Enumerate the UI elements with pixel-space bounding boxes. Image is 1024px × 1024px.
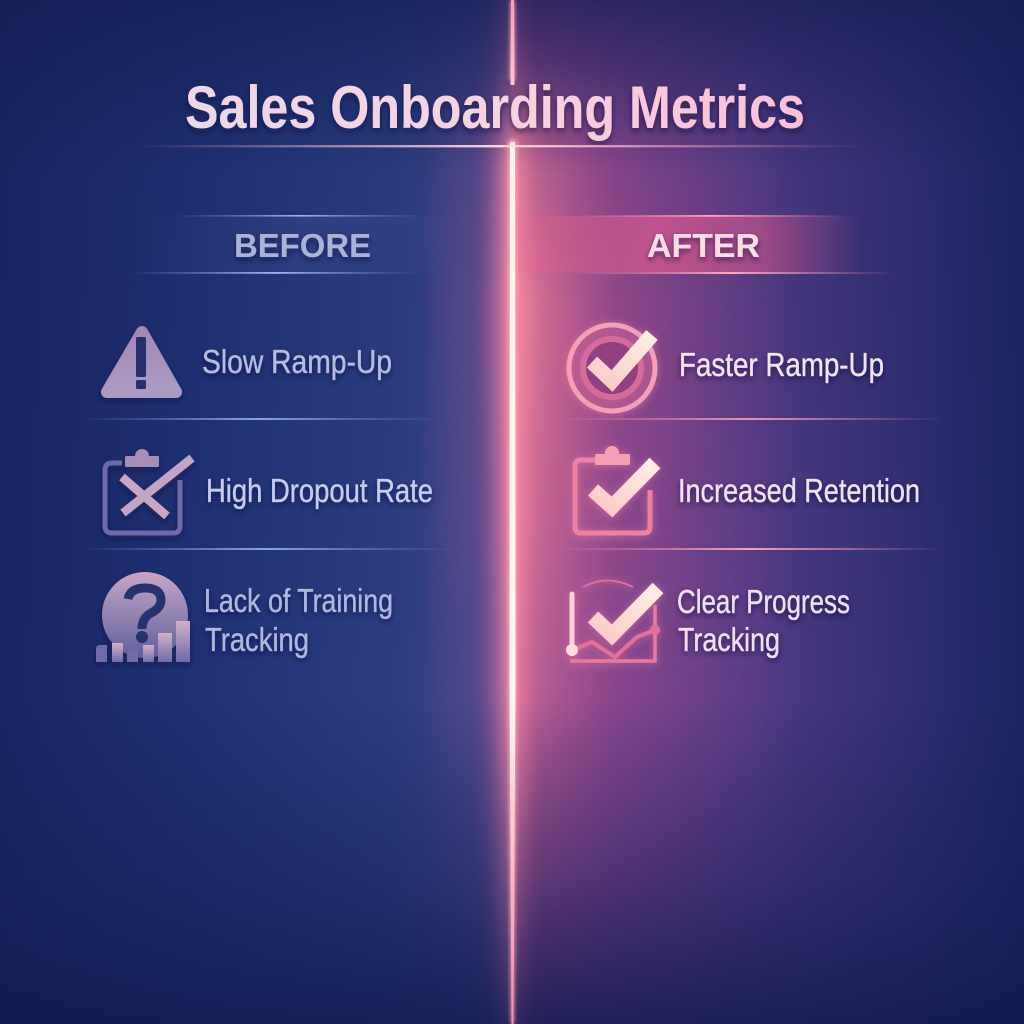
label: increased retention: Increased Retention [678,472,920,509]
label: lack of training tracking: Lack of Training [204,582,393,619]
row: faster ramp-up [569,325,884,411]
panel: after [518,215,945,661]
row: lack of training tracking [96,572,393,662]
row: high dropout rate [105,449,433,533]
label: clear progress tracking: Clear Progress [677,583,850,620]
label: faster ramp-up: Faster Ramp-Up [679,346,884,383]
label: slow ramp-up: Slow Ramp-Up [202,343,392,380]
icon: question with bars [96,572,190,662]
central glowing divider [500,0,525,1024]
label: high dropout rate: High Dropout Rate [206,472,433,509]
label: lack of training tracking [204,582,393,658]
row: clear progress tracking [566,580,850,661]
row: slow ramp-up [107,332,392,392]
panel: before [80,215,475,662]
before heading [130,215,475,274]
title: Sales Onboarding Metrics [185,74,805,141]
icon: chart with check [566,580,660,661]
label: lack of training tracking: Tracking [205,621,309,658]
icon: clipboard with x [105,449,192,533]
after heading [518,215,895,274]
before heading: BEFORE [234,227,371,264]
after heading: AFTER [647,227,760,264]
icon: target with check [569,325,655,411]
row: increased retention [575,446,920,533]
label: clear progress tracking [677,583,850,658]
label: clear progress tracking: Tracking [678,621,780,658]
icon: warning triangle [107,332,176,392]
icon: clipboard with check [575,446,655,533]
